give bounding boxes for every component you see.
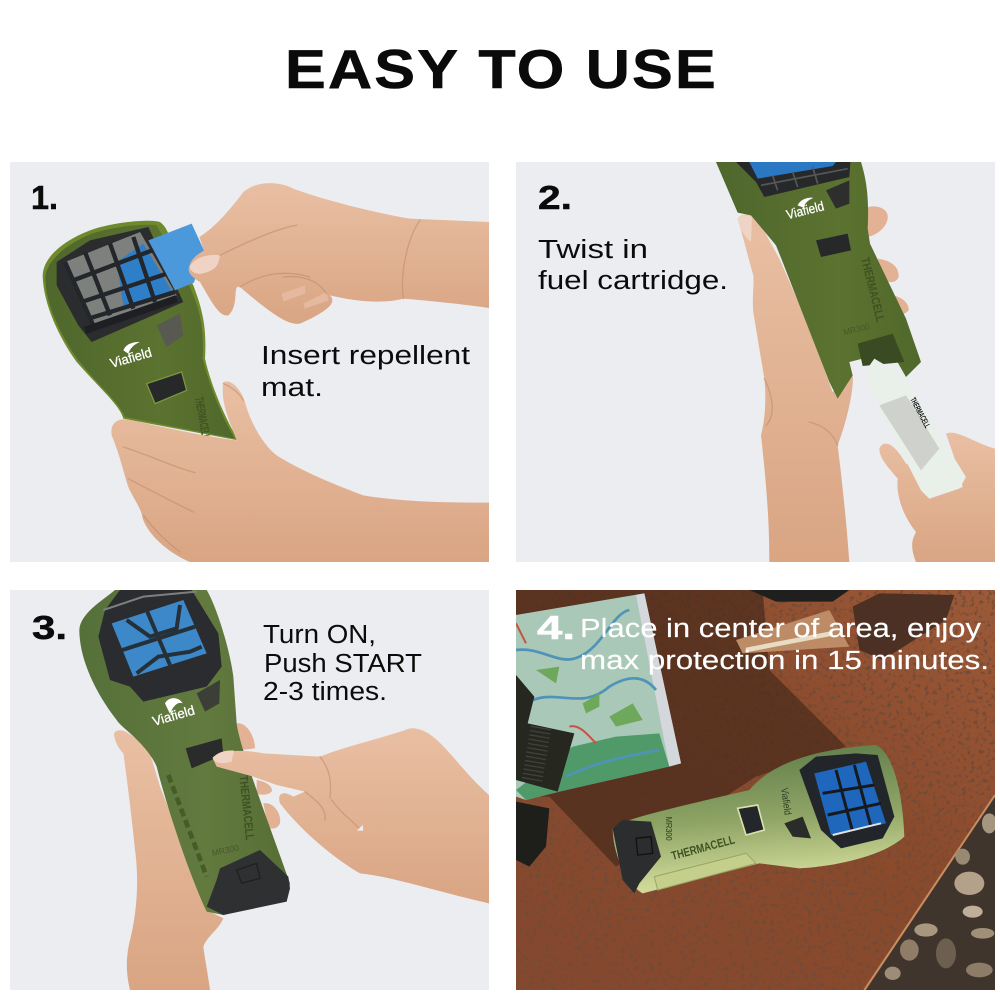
step 3 fingers behind device (237, 723, 280, 829)
step 4 device logo: Viafield (778, 787, 793, 816)
device in sunlight (613, 745, 904, 893)
gravel background (864, 795, 997, 990)
step 3 text (264, 624, 422, 700)
step 3 text: Push START (264, 650, 422, 678)
step 3 device (79, 590, 290, 915)
step 1 number: 1. (31, 179, 58, 216)
step 2 number: 2. (538, 179, 572, 216)
step 1 text: Insert repellent (261, 342, 470, 370)
step 1 text: mat. (261, 374, 323, 402)
step 2 text: fuel cartridge. (538, 267, 728, 295)
title: EASY TO USE (285, 38, 718, 100)
step 3 device: MR300 (211, 842, 240, 858)
step 3 text: Turn ON, (263, 621, 376, 649)
step 1 upper hand (189, 183, 489, 324)
step 4 text: Place in center of area, enjoy (580, 615, 981, 643)
step 3 number: 3. (32, 609, 67, 646)
step 3 text: 2-3 times. (263, 678, 387, 706)
knife and sheath (736, 590, 954, 660)
panel: step 4 (516, 590, 997, 990)
step 3 device logo: Viafield (151, 703, 196, 729)
step 1 lower hand (111, 381, 489, 562)
step 2 lower hand (879, 433, 995, 562)
step 3 holding hand (114, 730, 223, 990)
panel: step 1 (10, 162, 489, 562)
binoculars (516, 675, 574, 867)
step 1 device: THERMACELL (192, 396, 213, 440)
device in sunlight: MR300 (664, 817, 673, 841)
step 2 device: THERMACELL (858, 256, 888, 323)
step 1 device (43, 221, 238, 440)
table shadow (516, 590, 846, 867)
step 1 device logo: Viafield (108, 345, 154, 371)
step 2 fuel cartridge: THERMACELL (908, 396, 933, 430)
step 2 device (716, 162, 921, 399)
step 2 device: MR300 (842, 321, 871, 337)
step 2 text: Twist in (538, 236, 648, 264)
panel: step 3 (10, 590, 489, 990)
step 4 number: 4. (537, 609, 575, 646)
step 3 pointing hand (213, 728, 489, 903)
step 4 text (580, 615, 989, 675)
step 2 hand holding device (738, 206, 909, 562)
step 3 device: THERMACELL (236, 775, 257, 841)
step 2 fuel cartridge (865, 359, 966, 499)
step 1 text (263, 345, 470, 396)
device in sunlight: THERMACELL (670, 833, 736, 863)
map (516, 593, 681, 800)
step 2 text (538, 236, 728, 295)
step 2 device logo: Viafield (785, 198, 826, 222)
panel: step 2 (516, 162, 995, 562)
step 1 repellent mat (148, 224, 204, 290)
step 4 text: max protection in 15 minutes. (580, 647, 989, 675)
